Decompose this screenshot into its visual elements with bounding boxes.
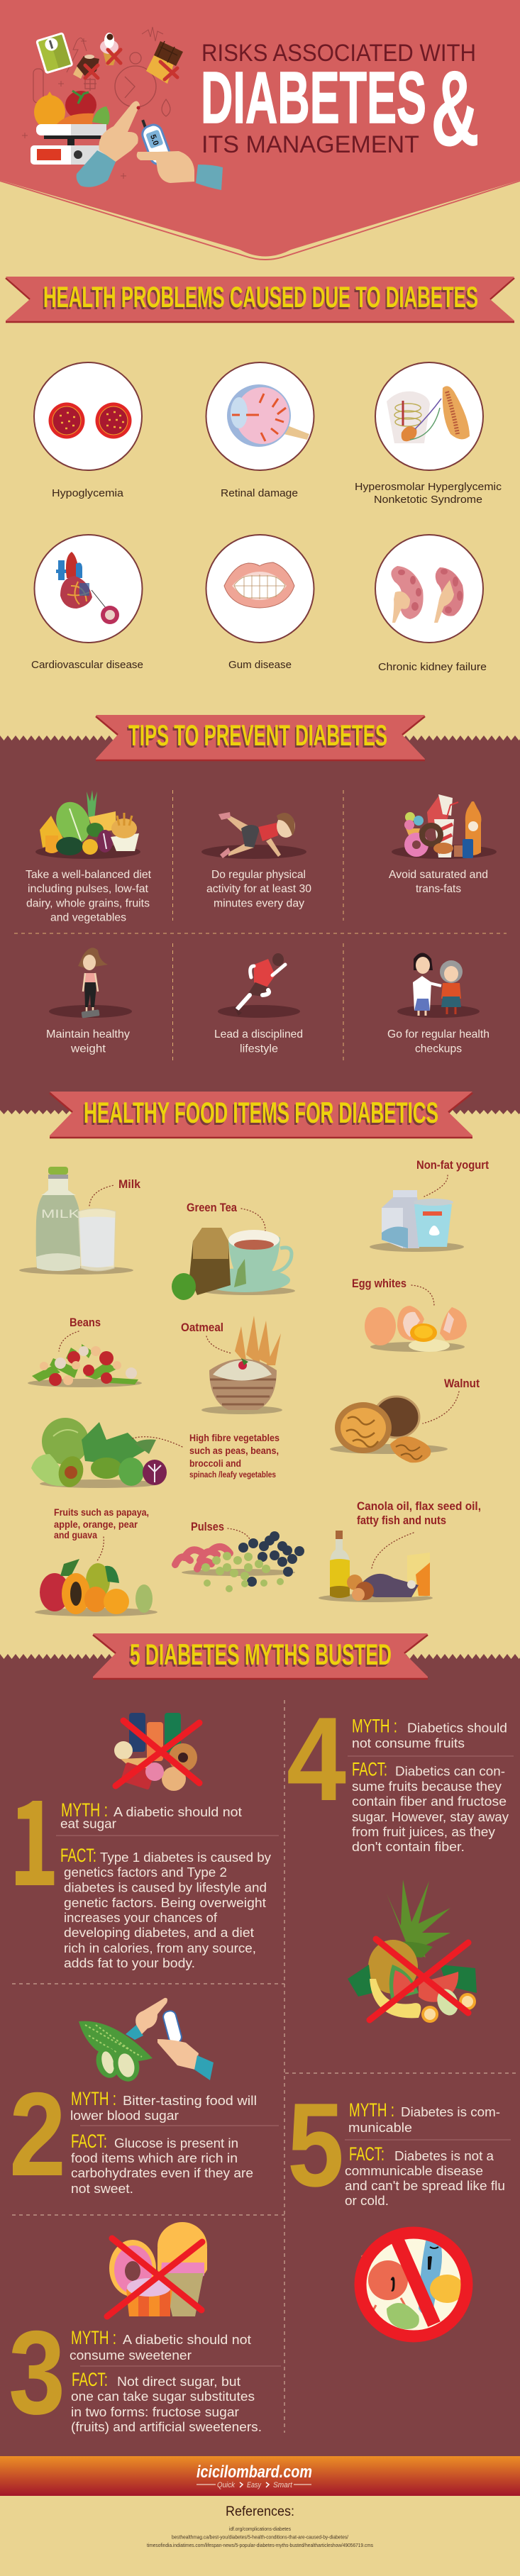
logo: icicilombard.com: Smart bbox=[273, 2481, 293, 2489]
label: retinal damage: Retinal damage bbox=[221, 487, 298, 499]
myth 5 bbox=[287, 2078, 511, 2337]
text: myth 1: genetics factors and Type 2 bbox=[64, 1865, 227, 1880]
logo: icicilombard.com: Easy bbox=[247, 2481, 262, 2489]
text: myth 2: food items which are rich in bbox=[71, 2150, 238, 2165]
label: hyperosmolar syndrome: Nonketotic Syndrome bbox=[374, 494, 482, 506]
text: myth 2: not sweet. bbox=[71, 2181, 133, 2196]
ribbon heading: healthy food bbox=[50, 1092, 472, 1138]
icon: junk food bbox=[392, 794, 497, 859]
food: high fibre vegetables: spinach /leafy vegetables bbox=[189, 1471, 276, 1479]
references: idf.org/complications-diabetes bbox=[229, 2526, 291, 2532]
logo: icicilombard.com: Quick bbox=[217, 2481, 235, 2489]
icon: vegetables on kitchen scale bbox=[31, 91, 110, 165]
food: fruits: Fruits such as papaya, bbox=[54, 1506, 149, 1518]
text: myth 4: FACT: bbox=[352, 1759, 387, 1780]
food: high fibre vegetables bbox=[31, 1418, 280, 1490]
title: ITS MANAGEMENT bbox=[201, 131, 419, 158]
text: running man: Lead a disciplined bbox=[214, 1028, 303, 1040]
text: myth 2 bbox=[70, 2088, 279, 2196]
icon: no fruit bbox=[348, 1880, 477, 2023]
food: pulses bbox=[175, 1520, 304, 1592]
icon: chocolate bar bbox=[146, 41, 183, 84]
food: egg whites: Egg whites bbox=[352, 1277, 406, 1290]
icon: running man bbox=[218, 953, 300, 1018]
text: junk food: trans-fats bbox=[416, 883, 461, 895]
number 2: 2 bbox=[9, 2067, 66, 2201]
food: pulses: Pulses bbox=[191, 1520, 224, 1533]
icon: weighing scale bbox=[35, 32, 74, 74]
icon: gum disease bbox=[206, 535, 314, 643]
ribbon heading: myths bbox=[93, 1633, 428, 1680]
text: myth 4: don't contain fiber. bbox=[352, 1839, 465, 1854]
icon: left hand pricking finger bbox=[77, 101, 140, 187]
header illustration: diabetes management bbox=[22, 27, 223, 190]
text: myth 2: Bitter-tasting food will bbox=[123, 2093, 257, 2108]
references: References: bbox=[226, 2504, 294, 2519]
text: myth 3: MYTH : bbox=[71, 2327, 116, 2348]
text: myth 5 bbox=[345, 2099, 511, 2208]
icon: no sugar bbox=[114, 1713, 199, 1791]
text: myth 4: Diabetics can con- bbox=[395, 1763, 505, 1779]
icon: hyperosmolar syndrome bbox=[375, 362, 483, 470]
text: doctor checkup bbox=[387, 1028, 489, 1055]
food: egg whites bbox=[352, 1277, 467, 1352]
text: balanced diet: including pulses, low-fat bbox=[28, 883, 149, 895]
food: fruits bbox=[35, 1506, 157, 1616]
food: milk bbox=[19, 1167, 141, 1275]
icon: cardiovascular disease bbox=[34, 535, 142, 643]
text: myth 5: communicable disease bbox=[345, 2163, 483, 2178]
panel: health problems bbox=[31, 362, 502, 673]
text: myth 4: MYTH : bbox=[352, 1715, 397, 1736]
text: balanced diet: and vegetables bbox=[50, 912, 126, 923]
food: high fibre vegetables: broccoli and bbox=[189, 1458, 241, 1469]
label: hypoglycemia: Hypoglycemia bbox=[52, 487, 124, 499]
text: exercise: Do regular physical bbox=[211, 869, 306, 881]
text: myth 4: Diabetics should bbox=[407, 1721, 507, 1735]
myth 2 bbox=[9, 1998, 279, 2201]
text: myth 2: Glucose is present in bbox=[114, 2136, 238, 2150]
label: chronic kidney failure: Chronic kidney failure bbox=[378, 661, 487, 673]
myth 1 bbox=[9, 1713, 279, 1970]
text: healthy weight: Maintain healthy bbox=[46, 1028, 130, 1040]
panel: healthy food bbox=[19, 1158, 489, 1616]
icon: no sweeteners bbox=[107, 2222, 207, 2316]
icon: chronic kidney failure bbox=[375, 535, 483, 643]
food: fruits: and guava bbox=[54, 1529, 97, 1540]
number 1: 1 bbox=[9, 1750, 60, 1919]
icon: no germs bbox=[358, 2232, 468, 2337]
text: myth 3: A diabetic should not bbox=[123, 2332, 251, 2347]
icon: balanced diet bbox=[35, 790, 140, 859]
text: myth 3: one can take sugar substitutes bbox=[71, 2389, 255, 2404]
ribbon heading: tips bbox=[96, 715, 425, 761]
number 3: 3 bbox=[9, 2306, 65, 2439]
icon: glucose meter bbox=[138, 115, 172, 167]
logo: icicilombard.com: icicilombard.com bbox=[197, 2463, 312, 2482]
text: healthy weight bbox=[46, 1028, 130, 1055]
text: myth 1: increases your chances of bbox=[64, 1910, 218, 1925]
text: myth 1: adds fat to your body. bbox=[64, 1955, 195, 1970]
label: hyperosmolar syndrome: Hyperosmolar Hyperglycemic bbox=[355, 481, 502, 493]
food: fruits: apple, orange, pear bbox=[54, 1519, 138, 1530]
text: doctor checkup: checkups bbox=[415, 1043, 462, 1055]
food: walnut: Walnut bbox=[444, 1377, 480, 1390]
text: myth 1: MYTH : bbox=[61, 1799, 108, 1821]
food: milk: Milk bbox=[118, 1177, 141, 1191]
icon: right hand holding meter bbox=[137, 151, 223, 190]
text: myth 3: FACT: bbox=[72, 2369, 108, 2390]
text: myth 3 bbox=[70, 2327, 281, 2434]
number 4: 4 bbox=[287, 1692, 346, 1826]
text: doctor checkup: Go for regular health bbox=[387, 1028, 489, 1040]
food: oatmeal: Oatmeal bbox=[181, 1321, 223, 1334]
icon: doctor checkup bbox=[397, 953, 480, 1018]
text: myth 1: diabetes is caused by lifestyle and bbox=[64, 1880, 267, 1895]
food: green tea bbox=[172, 1201, 295, 1300]
text: junk food: Avoid saturated and bbox=[389, 869, 488, 881]
text: myth 1: developing diabetes, and a diet bbox=[64, 1925, 254, 1940]
text: myth 5: MYTH : bbox=[349, 2099, 394, 2121]
title: & bbox=[431, 48, 480, 169]
text: myth 3: (fruits) and artificial sweeteners. bbox=[71, 2419, 262, 2434]
section background: myths bbox=[0, 1654, 520, 2456]
food: oils and nuts: fatty fish and nuts bbox=[357, 1514, 446, 1527]
myth 4 bbox=[287, 1692, 514, 2023]
header banner bbox=[0, 0, 520, 260]
icon: glucose meter: 5.0 bbox=[148, 133, 160, 147]
label: gum disease: Gum disease bbox=[228, 659, 292, 671]
text: myth 5: FACT: bbox=[349, 2143, 385, 2165]
text: myth 4 bbox=[348, 1715, 514, 1854]
icon: retinal damage bbox=[206, 362, 314, 470]
section background: tips bbox=[0, 735, 520, 1110]
number 5: 5 bbox=[287, 2078, 344, 2211]
references: besthealthmag.ca/best-you/diabetes/5-health-conditions-that-are-caused-by-diabetes/ bbox=[172, 2533, 349, 2541]
icon: ice pop bbox=[73, 55, 99, 79]
text: myth 1: genetic factors. Being overweight bbox=[64, 1895, 266, 1910]
text: myth 5: municable bbox=[348, 2120, 412, 2135]
text: myth 4: from fruit juices, as they bbox=[352, 1824, 496, 1839]
text: myth 3: Not direct sugar, but bbox=[117, 2374, 240, 2389]
panel: myths bbox=[9, 1692, 516, 2439]
text: myth 4: not consume fruits bbox=[352, 1736, 465, 1750]
text: running man bbox=[214, 1028, 303, 1055]
text: myth 5: and can't be spread like flu bbox=[345, 2178, 505, 2193]
text: myth 3: consume sweetener bbox=[70, 2348, 192, 2363]
text: myth 4: sugar. However, stay away bbox=[352, 1809, 509, 1824]
text: exercise: activity for at least 30 bbox=[206, 883, 311, 895]
text: myth 5: Diabetes is com- bbox=[401, 2104, 500, 2119]
text: myth 1 bbox=[56, 1799, 279, 1970]
food: walnut bbox=[330, 1377, 480, 1462]
food: high fibre vegetables: High fibre vegetables bbox=[189, 1432, 280, 1443]
food: non-fat yogurt: Non-fat yogurt bbox=[416, 1158, 489, 1172]
text: balanced diet bbox=[26, 869, 152, 923]
ribbon heading: health problems bbox=[6, 277, 514, 323]
text: myth 4: contain fiber and fructose bbox=[352, 1794, 507, 1809]
label: cardiovascular disease: Cardiovascular disease bbox=[31, 659, 143, 671]
food: high fibre vegetables: such as peas, beans, bbox=[189, 1445, 279, 1456]
text: exercise: minutes every day bbox=[214, 898, 304, 909]
icon: exercise bbox=[201, 812, 306, 859]
text: myth 2: lower blood sugar bbox=[70, 2108, 179, 2123]
food: oatmeal bbox=[181, 1316, 282, 1414]
text: myth 2: MYTH : bbox=[71, 2088, 116, 2109]
food: oils and nuts: Canola oil, flax seed oil, bbox=[357, 1499, 481, 1513]
logo: icicilombard.com bbox=[197, 2463, 312, 2489]
food: green tea: Green Tea bbox=[187, 1201, 237, 1214]
text: myth 1: rich in calories, from any source, bbox=[64, 1941, 256, 1955]
icon: bitter gourd and glucose test bbox=[79, 1998, 214, 2084]
panel: tips bbox=[14, 790, 507, 1064]
text: myth 1: eat sugar bbox=[60, 1816, 116, 1831]
text: myth 2: carbohydrates even if they are bbox=[71, 2165, 253, 2180]
text: running man: lifestyle bbox=[240, 1043, 278, 1055]
title: RISKS ASSOCIATED WITH bbox=[201, 40, 476, 67]
title bbox=[201, 40, 480, 169]
text: balanced diet: dairy, whole grains, fruits bbox=[26, 898, 150, 909]
food: beans: Beans bbox=[70, 1316, 101, 1329]
text: balanced diet: Take a well-balanced diet bbox=[26, 869, 152, 881]
text: myth 1: A diabetic should not bbox=[114, 1804, 242, 1819]
icon: healthy weight bbox=[49, 948, 132, 1018]
text: exercise bbox=[206, 869, 311, 909]
references: timesofindia.indiatimes.com/lifespan-news/5-popular-diabetes-myths-busted/healtharticleshow/49056719.cms bbox=[147, 2542, 373, 2548]
food: non-fat yogurt bbox=[370, 1158, 489, 1252]
icon: hypoglycemia bbox=[34, 362, 142, 470]
icon: cupcake bbox=[100, 33, 121, 65]
food: milk: MILK bbox=[41, 1207, 80, 1221]
footer band bbox=[0, 2456, 520, 2496]
text: myth 3: in two forms: fructose sugar bbox=[71, 2404, 239, 2419]
text: healthy weight: weight bbox=[70, 1043, 106, 1055]
myth 3 bbox=[9, 2222, 281, 2439]
text: myth 1: Type 1 diabetes is caused by bbox=[100, 1850, 272, 1865]
label: hyperosmolar syndrome bbox=[355, 481, 502, 506]
text: myth 4: sume fruits because they bbox=[352, 1779, 502, 1794]
text: junk food bbox=[389, 869, 488, 895]
text: myth 5: or cold. bbox=[345, 2193, 389, 2208]
text: myth 1: FACT: bbox=[60, 1845, 96, 1866]
food: beans bbox=[28, 1316, 142, 1387]
food: oils and nuts bbox=[319, 1499, 481, 1602]
references bbox=[147, 2504, 373, 2548]
text: myth 2: FACT: bbox=[71, 2131, 107, 2152]
text: myth 5: Diabetes is not a bbox=[394, 2148, 494, 2163]
